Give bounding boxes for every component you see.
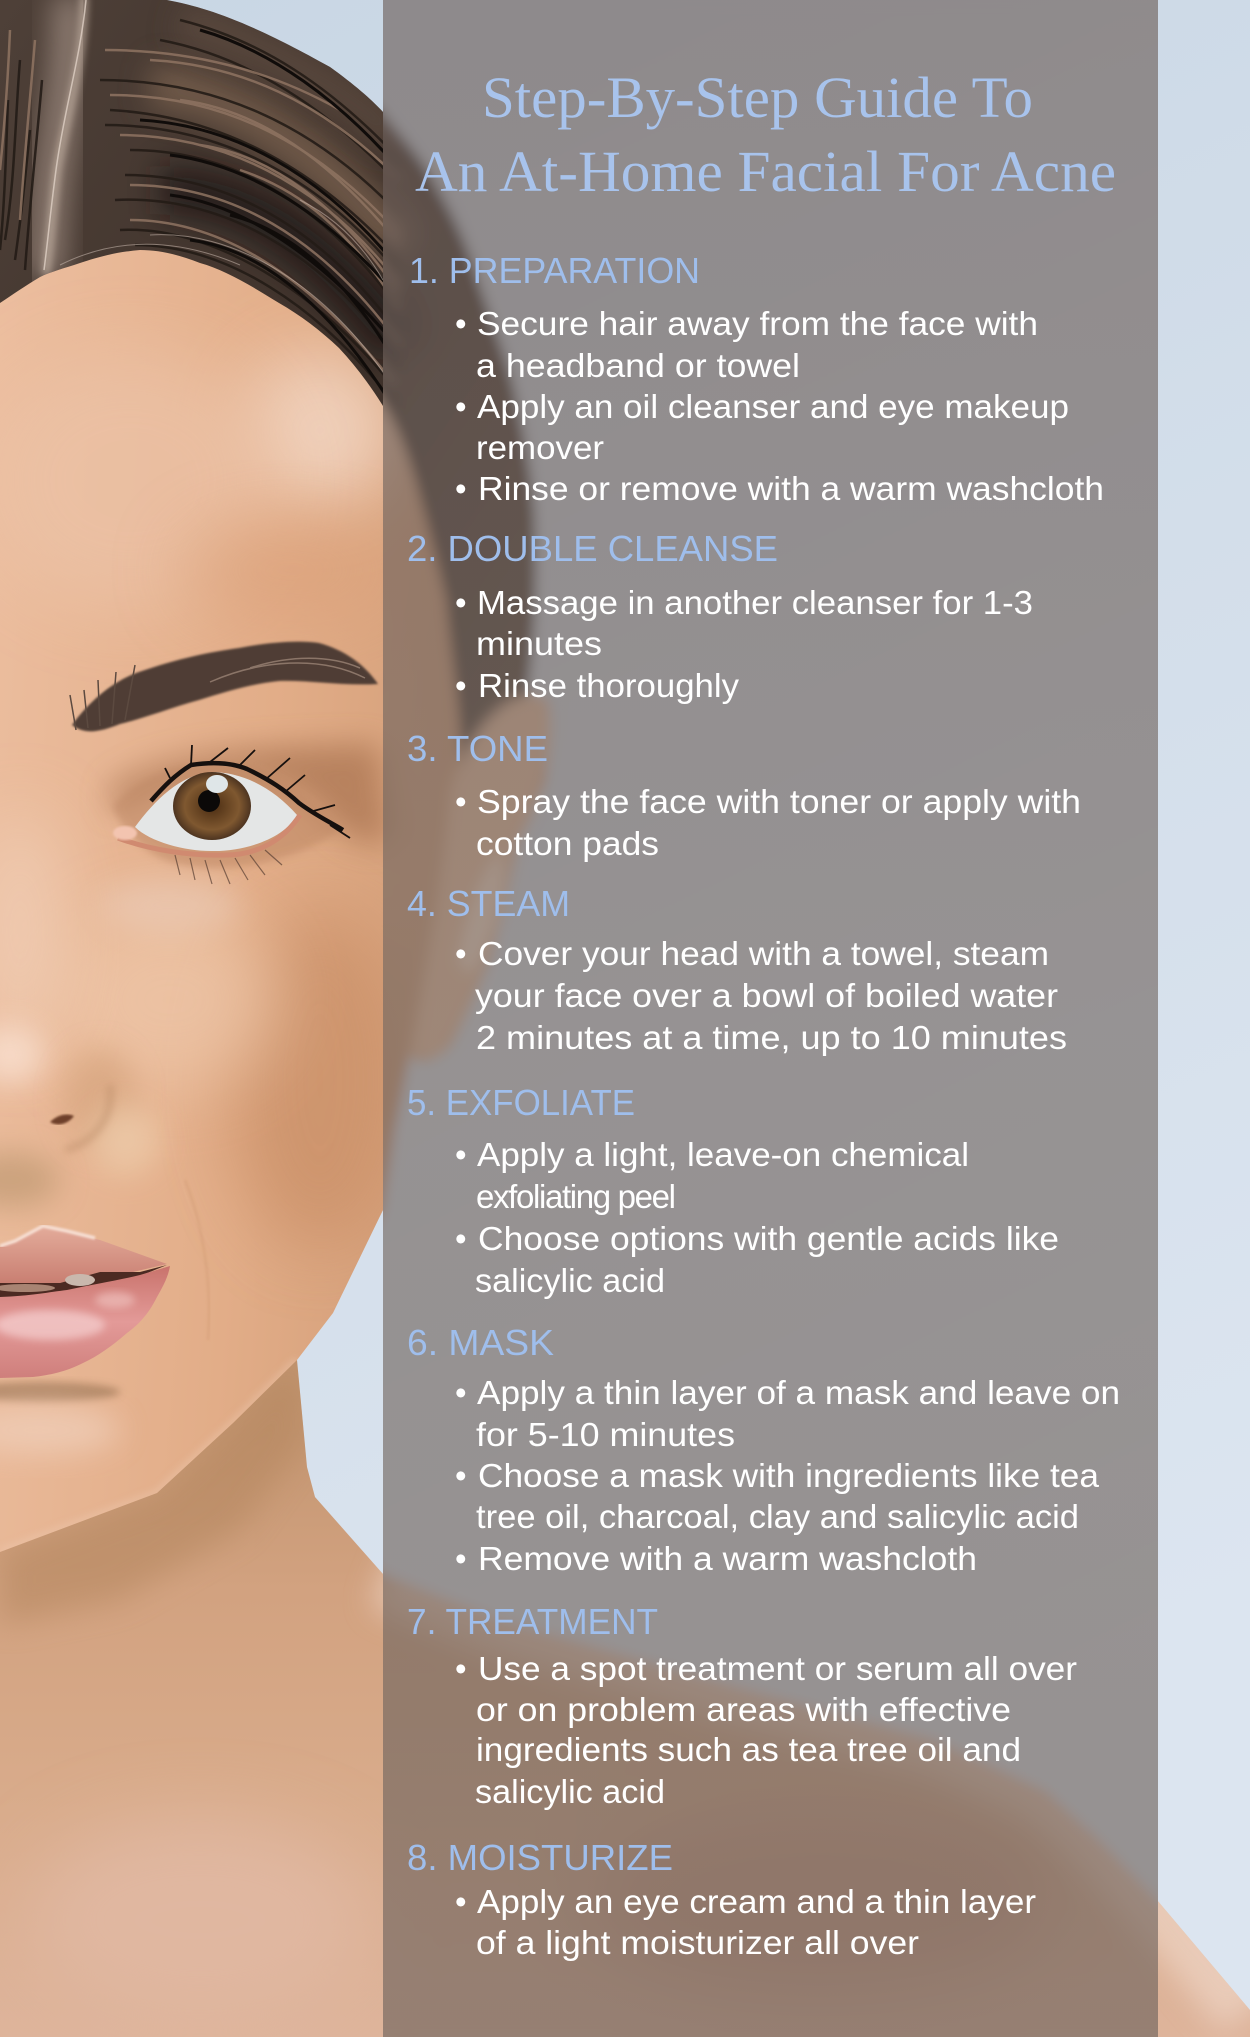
list: preparation steps: a headband or towel <box>476 347 800 384</box>
list: mask steps: • <box>455 1540 467 1577</box>
heading: steam: 4. STEAM <box>407 883 570 924</box>
heading: treatment: 7. TREATMENT <box>407 1601 658 1642</box>
list: treatment steps: • <box>455 1650 467 1687</box>
step 1: preparation <box>409 250 1104 507</box>
list: exfoliate steps: • <box>455 1220 467 1257</box>
list: mask steps: tree oil, charcoal, clay and salicylic acid <box>476 1498 1079 1535</box>
list: preparation steps: Apply an oil cleanser and eye makeup <box>477 388 1069 425</box>
list: exfoliate steps: Choose options with gentle acids like <box>478 1220 1059 1257</box>
heading: preparation: 1. PREPARATION <box>409 250 700 291</box>
heading: exfoliate: 5. EXFOLIATE <box>407 1082 635 1123</box>
list: exfoliate steps <box>455 1136 1059 1299</box>
heading: double cleanse: 2. DOUBLE CLEANSE <box>407 528 778 569</box>
list: double cleanse steps <box>455 584 1033 704</box>
list: double cleanse steps: • <box>455 667 467 704</box>
step 6: mask <box>407 1322 1120 1577</box>
step 7: treatment <box>407 1601 1077 1810</box>
list: mask steps: for 5-10 minutes <box>476 1416 735 1453</box>
list: preparation steps: • <box>455 470 467 507</box>
list: moisturize steps: • <box>455 1883 467 1920</box>
list: tone steps: • <box>455 783 467 820</box>
list: moisturize steps <box>455 1883 1036 1961</box>
list: tone steps: cotton pads <box>476 825 659 862</box>
list: moisturize steps: Apply an eye cream and a thin layer <box>477 1883 1036 1920</box>
list: preparation steps: Secure hair away from the face with <box>477 305 1038 342</box>
list: steam steps: • <box>455 935 467 972</box>
step 8: moisturize <box>407 1837 1036 1961</box>
heading: mask: 6. MASK <box>407 1322 554 1363</box>
title <box>415 65 1116 204</box>
list: double cleanse steps: Rinse thoroughly <box>478 667 740 704</box>
list: treatment steps <box>455 1650 1077 1810</box>
heading: tone: 3. TONE <box>407 728 548 769</box>
step 5: exfoliate <box>407 1082 1059 1299</box>
list: double cleanse steps: Massage in another cleanser for 1-3 <box>477 584 1033 621</box>
list: exfoliate steps: salicylic acid <box>475 1262 665 1299</box>
list: steam steps: Cover your head with a towel, steam <box>478 935 1049 972</box>
list: moisturize steps: of a light moisturizer all over <box>476 1924 919 1961</box>
list: tone steps: Spray the face with toner or apply with <box>477 783 1081 820</box>
list: steam steps <box>455 935 1067 1056</box>
list: mask steps <box>455 1374 1120 1577</box>
list: treatment steps: salicylic acid <box>475 1773 665 1810</box>
step 3: tone <box>407 728 1081 862</box>
list: double cleanse steps: • <box>455 584 467 621</box>
list: preparation steps: Rinse or remove with a warm washcloth <box>478 470 1104 507</box>
list: double cleanse steps: minutes <box>476 625 602 662</box>
step 2: double cleanse <box>407 528 1033 704</box>
list: exfoliate steps: exfoliating peel <box>476 1178 676 1215</box>
list: mask steps: Apply a thin layer of a mask and leave on <box>477 1374 1120 1411</box>
heading: moisturize: 8. MOISTURIZE <box>407 1837 673 1878</box>
list: treatment steps: ingredients such as tea tree oil and <box>476 1731 1021 1768</box>
list: mask steps: • <box>455 1374 467 1411</box>
list: preparation steps: remover <box>476 429 604 466</box>
list: mask steps: • <box>455 1457 467 1494</box>
title: An At-Home Facial For Acne <box>415 139 1116 204</box>
list: preparation steps: • <box>455 305 467 342</box>
list: steam steps: 2 minutes at a time, up to 10 minutes <box>476 1019 1067 1056</box>
list: treatment steps: or on problem areas with effective <box>476 1691 1011 1728</box>
title: Step-By-Step Guide To <box>482 65 1033 130</box>
list: preparation steps <box>455 305 1104 507</box>
panel: translucent guide column <box>383 0 1158 2037</box>
list: mask steps: Remove with a warm washcloth <box>478 1540 977 1577</box>
list: exfoliate steps: Apply a light, leave-on chemical <box>477 1136 969 1173</box>
list: steam steps: your face over a bowl of boiled water <box>475 977 1058 1014</box>
step 4: steam <box>407 883 1067 1056</box>
list: tone steps <box>455 783 1081 862</box>
list: mask steps: Choose a mask with ingredients like tea <box>478 1457 1100 1494</box>
list: treatment steps: Use a spot treatment or serum all over <box>478 1650 1077 1687</box>
list: preparation steps: • <box>455 388 467 425</box>
list: exfoliate steps: • <box>455 1136 467 1173</box>
